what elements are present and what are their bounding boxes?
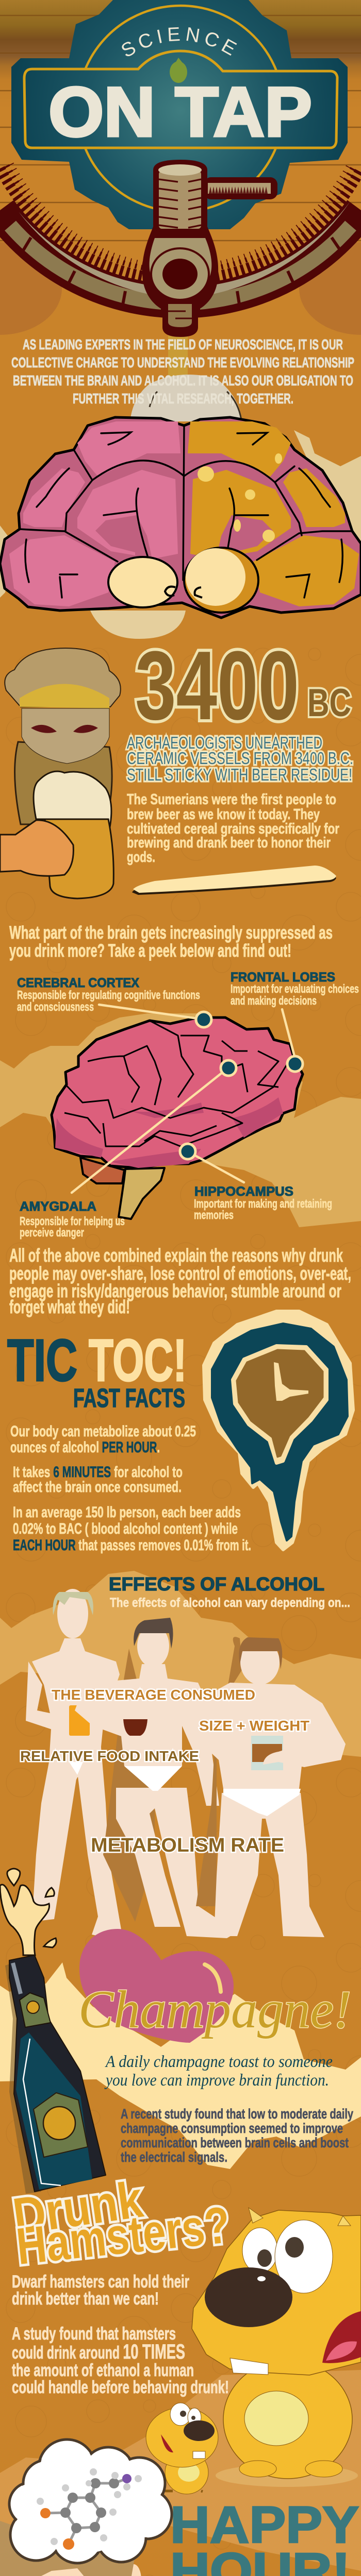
fact: BAC: EACH HOUR that passes removes 0.01% from it.	[13, 1537, 251, 1554]
fissures	[64, 1021, 289, 1146]
champagne study text	[121, 2106, 353, 2165]
text: Sumerians: gods.	[127, 849, 155, 866]
side arm	[204, 177, 277, 199]
illustration: Sumerian figure with beer	[0, 648, 121, 899]
barrel	[153, 160, 207, 233]
logo badge: Science on Tap	[11, 0, 348, 229]
fact: BAC: In an average 150 lb person, each beer adds	[13, 1504, 241, 1521]
wheel spikes	[0, 163, 361, 279]
man two: muscular	[75, 1618, 237, 1938]
left folds	[9, 421, 180, 606]
label: cerebral cortex: CEREBRAL CORTEX	[17, 976, 139, 990]
foam on mug	[34, 771, 111, 835]
fissure lines	[20, 426, 352, 598]
man two shadow	[103, 1649, 155, 1922]
molecule hydrogen atoms	[37, 2468, 142, 2545]
hamster nose	[205, 2267, 292, 2327]
label: amygdala: AMYGDALA	[20, 1199, 96, 1214]
brain stem	[119, 1168, 165, 1219]
label: cerebral cortex: Responsible for regulating cognitive functions	[17, 988, 200, 1002]
fact: metabolize: Our body can metabolize about 0.25	[10, 1423, 196, 1440]
cream wave backdrop	[0, 1962, 361, 2169]
heading: effects of alcohol	[109, 1573, 350, 1610]
tap handle	[142, 160, 277, 337]
arm of man three	[263, 1739, 346, 1767]
factor labels: SIZE + WEIGHT	[199, 1718, 309, 1734]
On Tap title: ON TAP	[48, 73, 312, 151]
tap wheel	[0, 163, 361, 312]
beer stream and foam from the tap	[130, 335, 242, 421]
label: hippocampus: memories	[194, 1208, 234, 1222]
Science arc text	[111, 41, 250, 70]
champagne heading and text: Champagne!	[78, 1980, 351, 2039]
diagram: brain anatomy	[17, 970, 359, 1239]
hamster teeth	[230, 2358, 268, 2375]
hamster eyes	[242, 2228, 277, 2273]
man three: large	[184, 1637, 346, 1937]
heading: happy hour: HAPPY	[170, 2496, 359, 2554]
cream swoosh	[132, 866, 336, 895]
heading: tic toc fast facts: TIC	[7, 1328, 77, 1394]
hamster shadow	[216, 2464, 358, 2487]
beer bubbles	[198, 453, 282, 542]
heading: happy hour	[170, 2496, 359, 2576]
foam backdrop behind men	[0, 1571, 361, 1757]
text: hamster facts: drink better than we can!	[12, 2289, 159, 2309]
boy hair	[0, 2521, 135, 2576]
pointer lines	[72, 1005, 294, 1193]
champagne subheading: A daily champagne toast to someone	[105, 2053, 333, 2071]
text: hamster facts: A study found that hamsters	[12, 2324, 176, 2344]
bottle	[5, 1958, 41, 2194]
heading: drunk hamsters: Hamsters?	[14, 2196, 233, 2276]
subheading: archaeologists	[127, 733, 353, 784]
illustration: champagne bottle	[0, 1869, 106, 2194]
brain base	[0, 417, 361, 618]
factor labels: THE BEVERAGE CONSUMED	[52, 1687, 255, 1703]
wheel ring	[0, 210, 361, 301]
beer mug	[45, 819, 113, 899]
gold band	[24, 51, 337, 148]
fact: metabolize: ounces of alcohol PER HOUR.	[10, 1439, 160, 1456]
boy head	[0, 2526, 122, 2576]
molecule bonds	[45, 2479, 127, 2544]
heading: tic toc fast facts: FAST FACTS	[73, 1383, 185, 1413]
label: cerebral cortex: and consciousness	[17, 1000, 94, 1013]
hamster head	[192, 2210, 361, 2375]
hop icon	[170, 58, 187, 83]
heading: drunk hamsters: Drunk	[9, 2171, 146, 2246]
question text	[9, 923, 333, 961]
champagne subheading: you love can improve brain function.	[104, 2071, 329, 2090]
molecule nitrogen and oxygen atoms	[40, 2474, 132, 2550]
champagne heading and text	[78, 1980, 353, 2165]
gold ring	[77, 6, 284, 212]
cloud fill	[11, 2441, 170, 2562]
illustration: boy with beer	[0, 2521, 141, 2576]
fact: six minutes: It takes 6 MINUTES for alcohol to	[13, 1464, 183, 1481]
cloud outline	[9, 2439, 172, 2563]
heading: tic toc fast facts: TOC!	[89, 1328, 187, 1394]
logo badge: Science on Tap: SCIENCE	[122, 27, 237, 56]
label: frontal lobes: and making decisions	[231, 994, 317, 1007]
foam backdrop behind brain	[0, 1013, 361, 1227]
label: cerebral cortex	[17, 976, 200, 1013]
factor labels: RELATIVE FOOD INTAKE	[20, 1748, 199, 1764]
intro text	[11, 336, 354, 406]
heading: 3400 BC: 3400	[135, 631, 299, 740]
man one: skinny	[26, 1589, 121, 1937]
cerebrum	[52, 1018, 303, 1168]
label: amygdala: Responsible for helping us	[20, 1214, 125, 1228]
label: hippocampus: HIPPOCAMPUS	[194, 1184, 293, 1199]
cerebellum	[80, 1158, 124, 1183]
icon: heart	[79, 1929, 234, 2043]
food bowl held by man two	[123, 1719, 147, 1736]
joint ring	[151, 248, 209, 300]
heading: drunk hamsters	[9, 2171, 233, 2276]
face	[22, 708, 109, 764]
label: frontal lobes: FRONTAL LOBES	[231, 970, 335, 985]
label: hippocampus	[194, 1184, 332, 1222]
thought bubble: dopamine molecule	[9, 2439, 172, 2563]
hamster body	[223, 2360, 352, 2479]
hamster mouth	[322, 2311, 361, 2363]
icon: melting clock	[204, 1311, 353, 1550]
text: all of the above	[9, 1245, 351, 1317]
champagne study text: the electrical signals.	[121, 2149, 227, 2165]
text: hamster facts: could drink around 10 TIMES	[12, 2341, 185, 2363]
crescents	[19, 212, 155, 295]
illustration: small hamster	[146, 2403, 218, 2494]
bulge	[142, 227, 218, 314]
brain shading	[55, 1097, 283, 1168]
fact: six minutes: affect the brain once consumed.	[13, 1479, 182, 1496]
factor labels	[20, 1687, 309, 1856]
foam splash	[0, 1885, 50, 1955]
fact: metabolize	[10, 1423, 196, 1456]
label: frontal lobes	[231, 970, 359, 1007]
stem	[162, 301, 198, 337]
factor labels: METABOLISM RATE	[91, 1835, 284, 1856]
pointer dots	[180, 1012, 303, 1159]
fact: six minutes	[13, 1464, 183, 1496]
text: hamster facts: could handle before behaving drunk!	[12, 2378, 229, 2397]
hat	[5, 648, 121, 707]
hand	[0, 820, 73, 876]
right folds	[188, 421, 359, 606]
beard	[15, 742, 112, 824]
illustration: three men	[26, 1589, 346, 1938]
illustration: cartoon brain filled with beer	[0, 417, 361, 639]
illustration: big hamster	[192, 2208, 361, 2487]
foam drops	[7, 1869, 56, 1947]
lighter backdrop behind hamsters	[0, 2370, 361, 2571]
heading: effects of alcohol: EFFECTS OF ALCOHOL	[109, 1573, 324, 1595]
whiskey bag held by man three	[251, 1736, 283, 1770]
text: Sumerians	[127, 791, 339, 866]
ring segment gaps	[23, 238, 340, 312]
text: hamster facts: the amount of ethanol a human	[12, 2361, 194, 2380]
molecule carbon atoms	[60, 2478, 119, 2533]
foam splashes	[294, 430, 361, 546]
fact: BAC	[13, 1504, 251, 1554]
label: amygdala	[20, 1199, 125, 1239]
text: hamster facts: Dwarf hamsters can hold their	[12, 2272, 189, 2292]
fact: BAC: 0.02% to BAC ( blood alcohol content ) while	[13, 1520, 238, 1537]
heading: tic toc fast facts	[7, 1328, 187, 1413]
champagne subheading	[104, 2053, 333, 2090]
fast facts text	[10, 1423, 251, 1554]
text: hamster facts	[12, 2272, 229, 2397]
gear badge shape	[11, 0, 348, 229]
cartoon eyes	[108, 557, 177, 607]
beer mug held by man one	[69, 1705, 90, 1736]
text: all of the above: forget what they did!	[9, 1296, 130, 1317]
label: amygdala: perceive danger	[20, 1226, 84, 1239]
man three shadow	[196, 1637, 242, 1906]
